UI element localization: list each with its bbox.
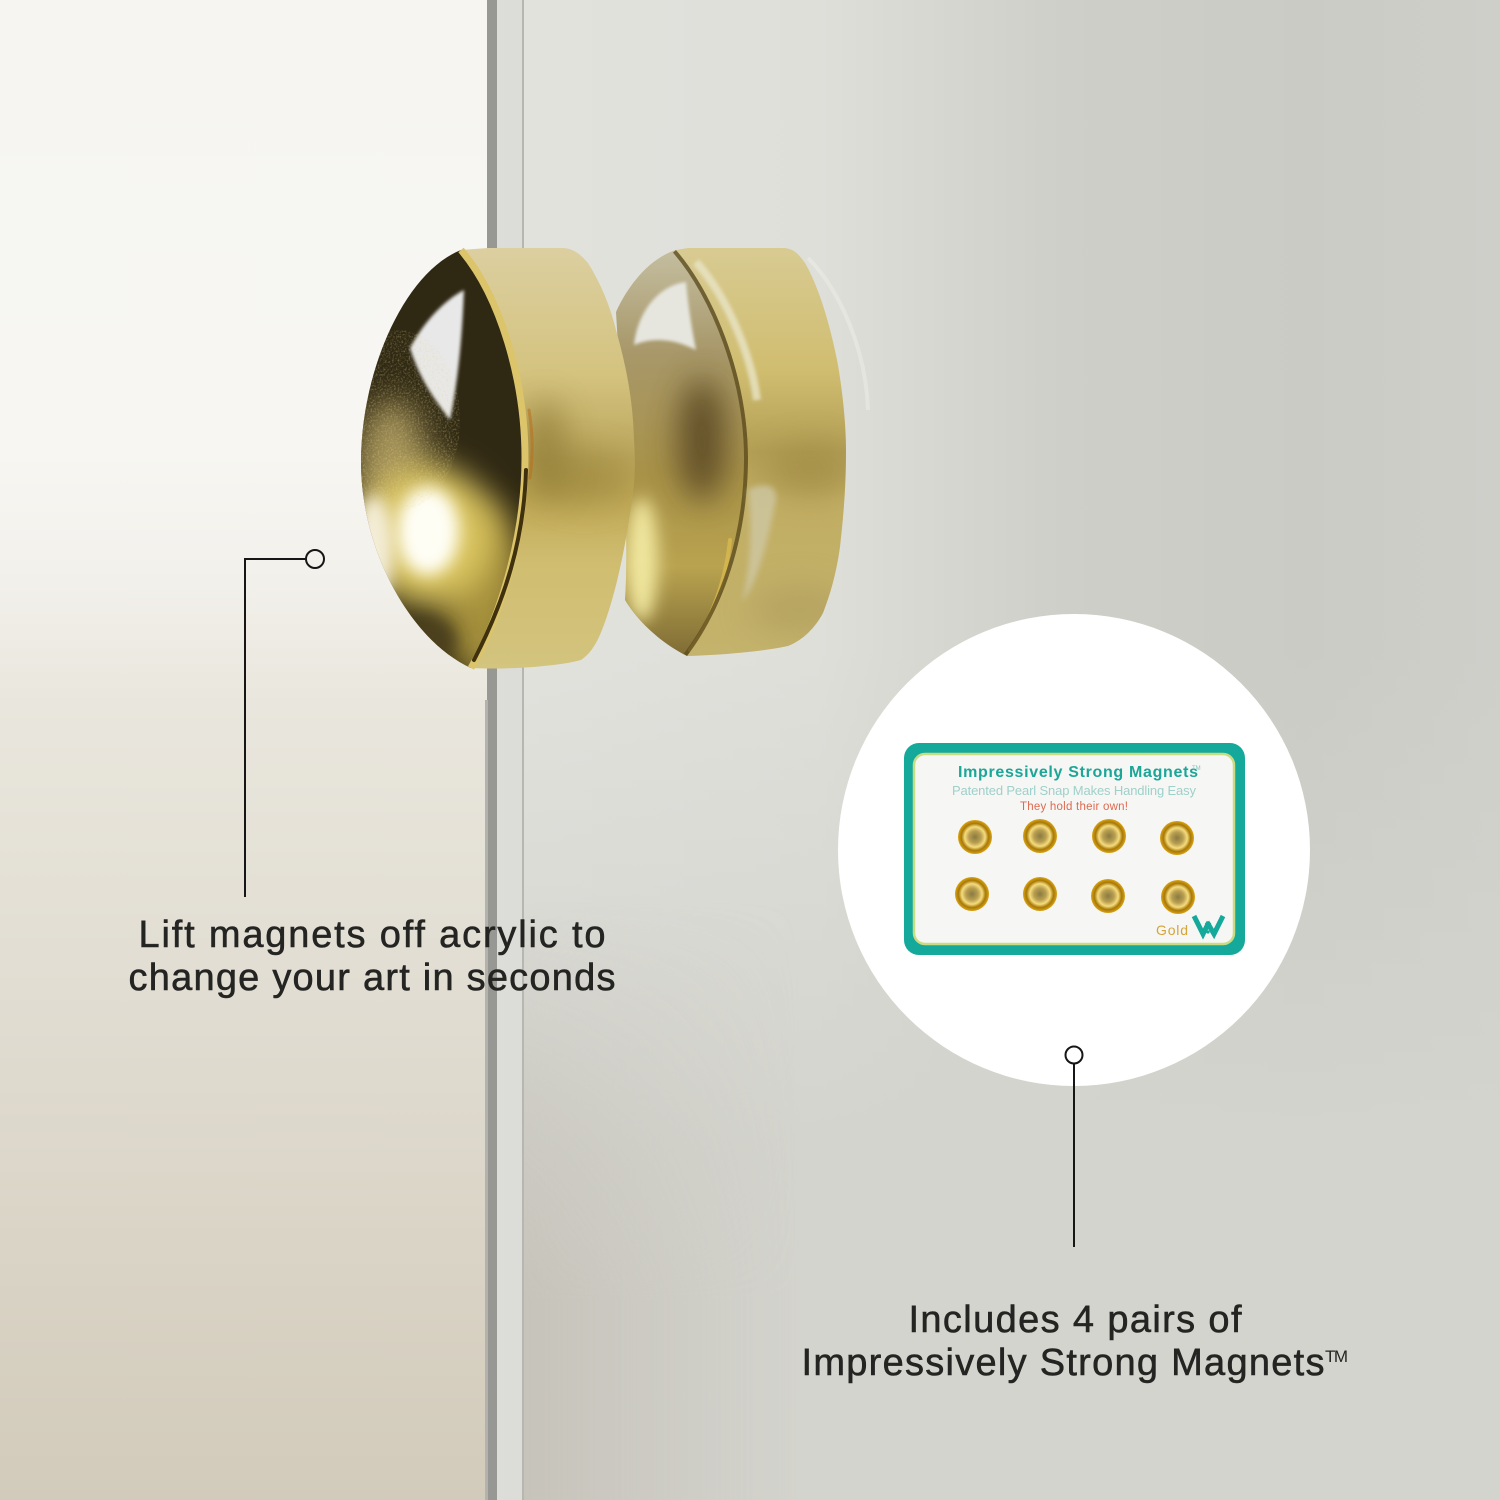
card gold label: Gold <box>1156 922 1188 938</box>
panel: product card circle <box>838 614 1310 1086</box>
callout: includes leader line <box>1066 1046 1082 1247</box>
product card <box>904 743 1245 955</box>
front magnet <box>340 248 635 680</box>
photo background: frosted left panel <box>0 0 487 1500</box>
text block: lift magnets caption <box>128 914 616 999</box>
callout: lift magnets leader line <box>245 550 324 897</box>
text block: includes caption: Impressively Strong Magnets <box>802 1342 1324 1384</box>
product card: TM <box>1192 766 1201 772</box>
text block: includes caption: TM <box>1325 1347 1348 1366</box>
card title: Impressively Strong Magnets <box>958 764 1198 781</box>
text block: lift magnets caption: Lift magnets off acrylic to <box>138 914 606 956</box>
acrylic sheet edge <box>485 0 524 1500</box>
small magnets <box>955 819 1195 914</box>
text block: includes caption <box>802 1299 1348 1384</box>
faint reflection behind back magnet <box>808 258 868 410</box>
card tagline: They hold their own! <box>1020 801 1128 813</box>
text block: lift magnets caption: change your art in seconds <box>128 957 616 999</box>
card logo <box>1194 916 1223 934</box>
magnet pair <box>340 248 868 680</box>
back magnet <box>616 248 855 656</box>
photo background: wall on the right <box>524 0 1500 1500</box>
text block: includes caption: Includes 4 pairs of <box>908 1299 1242 1341</box>
card subtitle: Patented Pearl Snap Makes Handling Easy <box>952 783 1196 798</box>
